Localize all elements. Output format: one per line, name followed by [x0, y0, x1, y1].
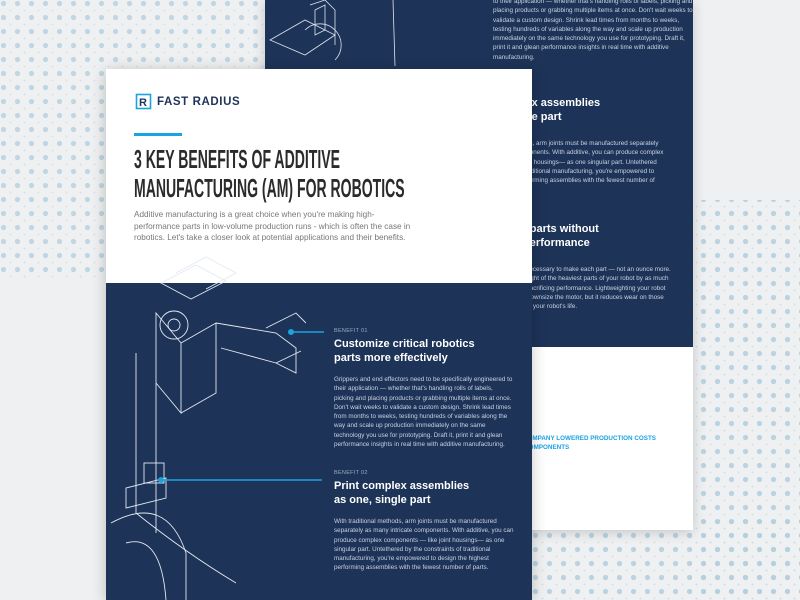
back benefit 02: With traditional methods, arm joints must be manufactured separately as many intricate components. With additive, you can produce complex components — like joint housings— as one singular part. Untethered by the constraints of traditional manufacturing, you're empowered to design the highest performing assemblies with the fewest number of parts.	[465, 140, 663, 193]
back benefit 03: sacrificing performance	[465, 237, 590, 249]
front navy panel	[106, 283, 532, 600]
connector 02	[158, 477, 322, 483]
back page	[265, 0, 693, 530]
logo	[136, 94, 240, 110]
benefit 02: Print complex assemblies	[334, 480, 469, 492]
back benefit 02: Print complex assemblies	[465, 97, 600, 109]
benefit 02: as one, single part	[334, 494, 431, 506]
benefit 02: BENEFIT 02	[334, 470, 368, 476]
back callout: HOW A ROBOTICS COMPANY LOWERED PRODUCTION COSTS ON HUNDREDS OF COMPONENTS	[465, 435, 656, 451]
benefit 01: BENEFIT 01	[334, 328, 368, 334]
benefit 01: Grippers and end effectors need to be specifically engineered to their application — whether that's handling rolls of labels, picking and placing products or grabbing multiple items at once. Don't wait weeks to validate a custom design. Shrink lead times from months to weeks, testing hundreds of variables along the way and scale up production immediately on the same technology you use for prototyping. Draft it, print it and glean performance insights in real time with additive manufacturing.	[334, 376, 512, 448]
back benefit 03: Lightweight parts without	[465, 223, 599, 235]
title: MANUFACTURING (AM) FOR ROBOTICS	[134, 173, 405, 203]
intro text: Additive manufacturing is a great choice when you're making high-performance parts in low-volume production runs - which is often the case in robotics. Let's take a closer look at potential applications and their benefits.	[134, 210, 410, 242]
back navy panel	[265, 0, 693, 347]
back benefit 02: as one, single part	[465, 111, 562, 123]
benefit 01	[334, 328, 512, 448]
connector 01	[288, 329, 324, 335]
back benefit 02	[465, 97, 664, 193]
front page	[106, 69, 532, 600]
robot line drawing	[110, 256, 306, 600]
benefit 01: Customize critical robotics	[334, 338, 475, 350]
title: 3 KEY BENEFITS OF ADDITIVE	[134, 144, 340, 174]
title	[134, 144, 405, 203]
benefit 01: parts more effectively	[334, 352, 448, 364]
back benefit 03: Use only the material necessary to make each part — not an ounce more. You can reduce the weight of the heaviest parts of your robot by as much as 70 percent without sacrificing performance. Lightweighting your robot not only allows you to downsize the motor, but it reduces wear on those components throughout your robot's life.	[465, 266, 671, 310]
back benefit 03	[465, 223, 671, 310]
logo: R	[139, 97, 147, 109]
logo: FAST RADIUS	[157, 96, 240, 108]
benefit 02	[334, 470, 514, 571]
back robot drawing	[269, 0, 396, 66]
accent bar	[134, 133, 182, 136]
benefit 02: With traditional methods, arm joints must be manufactured separately as many intricate components. With additive, you can produce complex components — like joint housings— as one singular part. Untethered by the constraints of traditional manufacturing, you're empowered to design the highest performing assemblies with the fewest number of parts.	[334, 518, 514, 571]
